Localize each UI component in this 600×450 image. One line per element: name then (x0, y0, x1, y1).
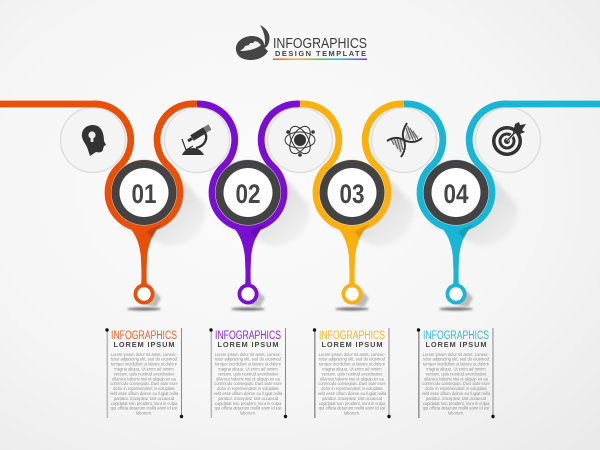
text block 03: commodo consequat. Duis aute irure (318, 381, 387, 386)
text block 02: pariatur. Excepteur sint occaecat (218, 396, 279, 401)
text block 02 (209, 328, 287, 418)
text block 01: cupidatat non proident, sunt in culpa (111, 401, 178, 406)
text block 04: commodo consequat. Duis aute irure (422, 381, 491, 386)
step 04 marker: 04 (444, 179, 468, 209)
text block 01: qui officia deserunt mollit anim id est (111, 406, 178, 411)
track segment: cyan (404, 104, 600, 228)
text block 02: laborum. (240, 411, 256, 416)
text block 01: tempor incididunt ut labore et dolore (111, 362, 178, 367)
text block 03: qui officia deserunt mollit anim id est (319, 406, 386, 411)
icon: microscope (182, 127, 210, 155)
header title: DESIGN TEMPLATE (275, 49, 366, 58)
text block 04: dolor in reprehenderit in voluptate (425, 386, 488, 391)
text block 02: qui officia deserunt mollit anim id est (215, 406, 282, 411)
text block 04: LOREM IPSUM (426, 340, 486, 349)
text block 03: velit esse cillum dolore eu fugiat nulla (318, 391, 387, 396)
step 01 marker: 01 (132, 179, 156, 209)
text block 02: Lorem ipsum dolor sit amet, consec- (215, 352, 282, 357)
text block 04: Lorem ipsum dolor sit amet, consec- (423, 352, 490, 357)
step 02 marker (215, 160, 281, 304)
text block 03: magna aliqua. Ut enim ad minim (322, 366, 382, 372)
text block 04: cupidatat non proident, sunt in culpa (423, 401, 490, 406)
text block 01: Lorem ipsum dolor sit amet, consec- (111, 352, 178, 357)
text block 03: tempor incididunt ut labore et dolore (319, 362, 386, 367)
text block 03: tetur adipiscing elit, sed do eiusmod (319, 357, 386, 362)
header logo (236, 25, 270, 60)
text block 02: veniam, quis nostrud exercitation (218, 371, 279, 376)
long shadows (120, 166, 518, 310)
text block 03: LOREM IPSUM (322, 340, 382, 349)
text block 01: pariatur. Excepteur sint occaecat (114, 396, 175, 401)
text block 02: LOREM IPSUM (218, 340, 278, 349)
step 04 marker (423, 160, 489, 304)
text block 04: laborum. (448, 411, 464, 416)
step 01 marker (111, 160, 177, 304)
text block 01: laborum. (136, 411, 152, 416)
text block 04: tempor incididunt ut labore et dolore (423, 362, 490, 367)
text block 02: tempor incididunt ut labore et dolore (215, 362, 282, 367)
text block 01: tetur adipiscing elit, sed do eiusmod (111, 357, 178, 362)
text block 04: veniam, quis nostrud exercitation (426, 371, 487, 376)
text block 03: laborum. (344, 411, 360, 416)
text block 01: dolor in reprehenderit in voluptate (113, 386, 176, 391)
text block 02: tetur adipiscing elit, sed do eiusmod (215, 357, 282, 362)
icon circles (60, 108, 540, 172)
header title: INFOGRAPHICS (273, 35, 367, 52)
text block 02: commodo consequat. Duis aute irure (214, 381, 283, 386)
text block 02: cupidatat non proident, sunt in culpa (215, 401, 282, 406)
text block 02: velit esse cillum dolore eu fugiat nulla (214, 391, 283, 396)
text block 01: magna aliqua. Ut enim ad minim (114, 366, 174, 372)
text block 02: ullamco laboris nisi ut aliquip ex ea (216, 376, 281, 381)
text block 03: cupidatat non proident, sunt in culpa (319, 401, 386, 406)
step 02 marker: 02 (236, 179, 260, 209)
text block 01: veniam, quis nostrud exercitation (114, 371, 175, 376)
text block 02: dolor in reprehenderit in voluptate (217, 386, 280, 391)
text block 03: ullamco laboris nisi ut aliquip ex ea (320, 376, 385, 381)
text block 03: dolor in reprehenderit in voluptate (321, 386, 384, 391)
text block 04: qui officia deserunt mollit anim id est (423, 406, 490, 411)
icon: DNA (387, 123, 422, 157)
text block 02: INFOGRAPHICS (215, 330, 281, 342)
text block 04: pariatur. Excepteur sint occaecat (426, 396, 487, 401)
step 03 marker: 03 (340, 179, 364, 209)
text block 04: tetur adipiscing elit, sed do eiusmod (423, 357, 490, 362)
text block 03: Lorem ipsum dolor sit amet, consec- (319, 352, 386, 357)
text block 01: INFOGRAPHICS (111, 330, 177, 342)
text block 04: velit esse cillum dolore eu fugiat nulla (422, 391, 491, 396)
text block 03: veniam, quis nostrud exercitation (322, 371, 383, 376)
text block 01 (105, 328, 183, 418)
track segment: amber (300, 104, 404, 228)
text block 03: INFOGRAPHICS (319, 330, 385, 342)
text block 04 (417, 328, 495, 418)
track segment: orange (0, 104, 197, 228)
text block 03: pariatur. Excepteur sint occaecat (322, 396, 383, 401)
step 03 marker (319, 160, 385, 304)
text block 04: INFOGRAPHICS (423, 330, 489, 342)
icon: head with light bulb (82, 125, 106, 156)
icon: atom (285, 123, 315, 157)
text block 04: magna aliqua. Ut enim ad minim (426, 366, 486, 372)
text block 03 (313, 328, 391, 418)
text block 01: LOREM IPSUM (114, 340, 174, 349)
text block 04: ullamco laboris nisi ut aliquip ex ea (424, 376, 489, 381)
header title (273, 35, 367, 60)
text block 01: ullamco laboris nisi ut aliquip ex ea (112, 376, 177, 381)
text block 02: magna aliqua. Ut enim ad minim (218, 366, 278, 372)
track segment: purple (197, 104, 300, 228)
icon: target with arrow (492, 122, 526, 156)
text block 01: velit esse cillum dolore eu fugiat nulla (110, 391, 179, 396)
text block 01: commodo consequat. Duis aute irure (110, 381, 179, 386)
